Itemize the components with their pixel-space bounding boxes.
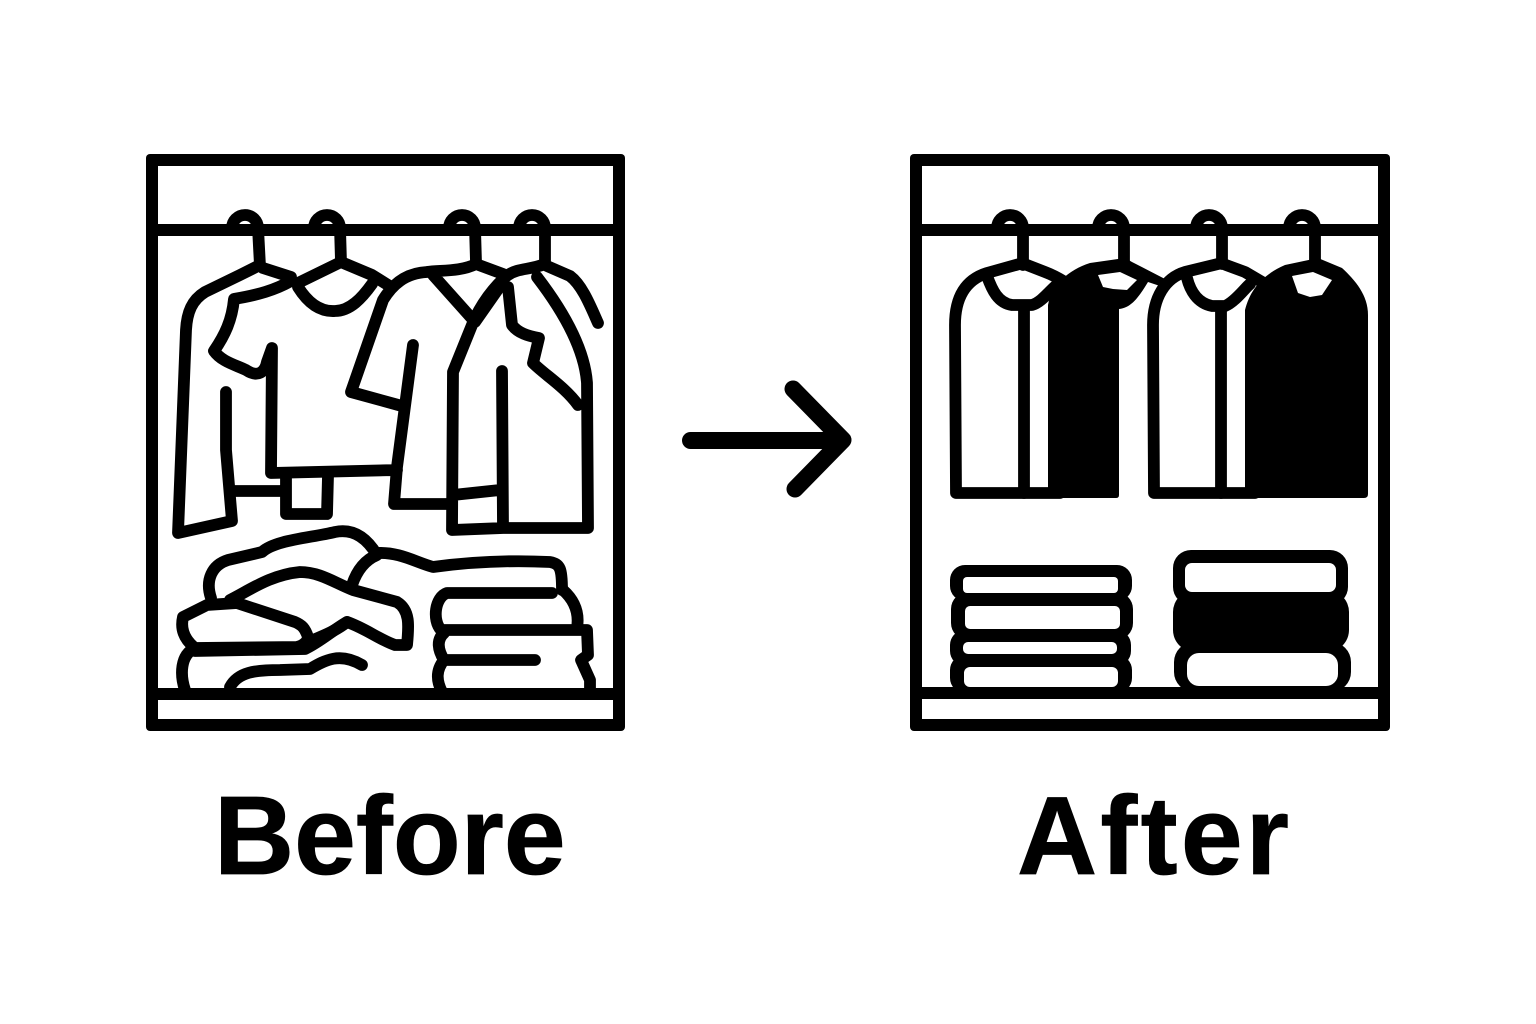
icon: hanging clothes before	[178, 262, 598, 533]
collar opening	[1098, 272, 1137, 290]
long coat	[452, 264, 598, 530]
arrow	[690, 389, 843, 489]
panel: before closet	[146, 154, 625, 731]
label: after: After	[1017, 774, 1289, 898]
icon: folded stack thick	[1173, 550, 1351, 692]
t-shirt	[214, 262, 452, 504]
short-sleeve jacket	[351, 264, 503, 406]
collar opening	[1292, 272, 1332, 297]
icon: hangers after	[997, 215, 1315, 265]
icon: messy clothes pile	[182, 531, 562, 690]
icon: black garment 4	[1245, 258, 1368, 498]
pants peeking below the t-shirt	[232, 476, 328, 514]
label: before: Before	[214, 774, 566, 898]
closet frame after	[910, 154, 1390, 731]
icon: folded stack before	[436, 590, 590, 692]
icon: folded stack thin	[950, 565, 1133, 693]
long-sleeve garment	[178, 266, 291, 533]
icon: white garment 1	[955, 263, 1065, 493]
icon: white garment 3	[1153, 263, 1262, 493]
icon: hangers before	[232, 215, 545, 266]
closet frame before	[146, 154, 625, 731]
icon: black garment 2	[1048, 258, 1165, 498]
panel: after closet	[910, 154, 1390, 731]
